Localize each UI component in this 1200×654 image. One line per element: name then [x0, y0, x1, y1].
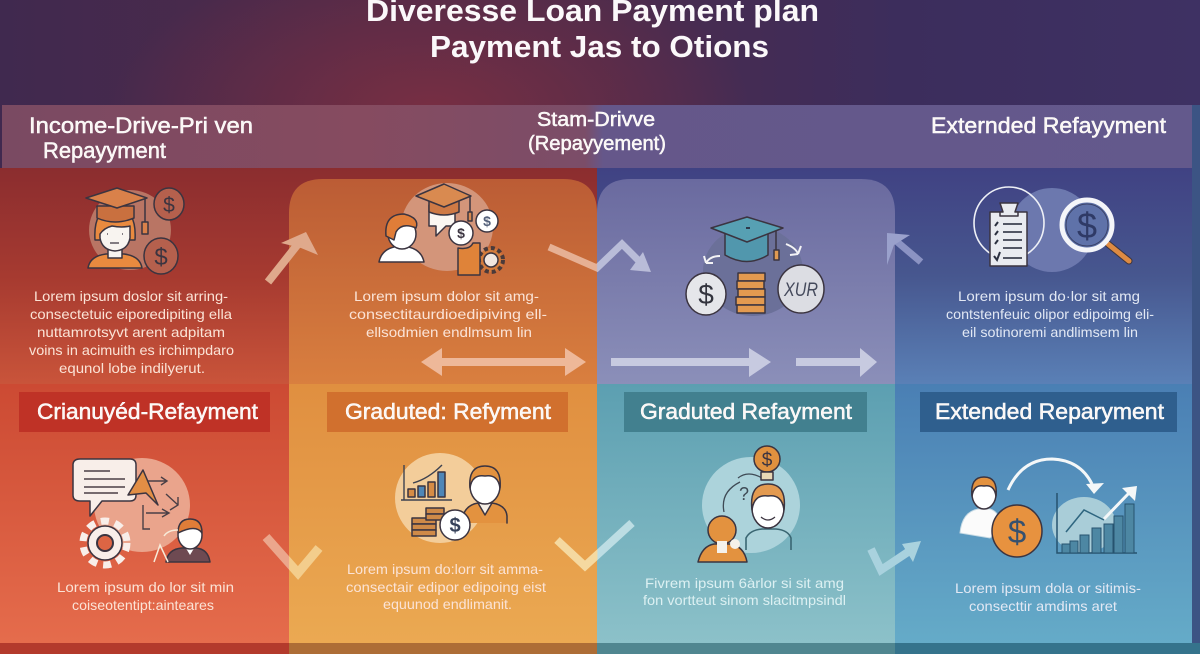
text: column 4 top: Lorem ipsum do·lor sit amg [958, 288, 1140, 304]
bottom heading: column 1: Crianuyéd-Refayment [37, 399, 258, 424]
arrow: zigzag between columns 2 and 3 [549, 244, 651, 272]
icon: cap with coins and stack [686, 217, 824, 316]
text: column 2 bottom: consectair edipor edipoing eist [346, 579, 546, 595]
text: column 4 top: contstenfeuic olipor edipoimg eli- [946, 306, 1154, 322]
text: column 1 top: Lorem ipsum doslor sit arring- [34, 288, 228, 304]
icon: student, coins and gear: $ [457, 225, 465, 241]
arrow: double-headed in column 2 [421, 348, 586, 376]
heading: extended: Externded Refayyment [931, 113, 1166, 138]
bottom heading: column 3: Graduted Refayment [640, 399, 852, 424]
icon: student, coins and gear: $ [483, 213, 491, 229]
panel: top column 2 [289, 179, 597, 384]
icon: student with cap and coins [86, 188, 184, 274]
text: column 2 top: ellsodmien endlmsum lin [366, 324, 532, 340]
footer strip [0, 643, 1200, 654]
icon: borrower, coin and rising chart: $ [1008, 513, 1026, 550]
panel: bottom column 3 [597, 384, 895, 643]
arrow: long right in column 3 [611, 348, 771, 377]
header band [2, 105, 1192, 168]
arrow: up-right from column 1 to 2 [268, 232, 318, 282]
heading: income-driven [29, 113, 253, 163]
icon: people with idea bulb: $ [762, 450, 773, 471]
text: column 1 bottom: Lorem ipsum do lor sit min [57, 579, 234, 595]
bottom heading: column 2 [327, 392, 568, 432]
arrow: right between columns 3 and 4 [796, 348, 877, 377]
icon: student with cap and coins: $ [163, 194, 175, 217]
title: Payment Jas to Otions [430, 29, 769, 64]
text: column 1 top: voins in acimuith es irchimpdaro [29, 342, 234, 358]
bottom heading: column 2: Graduted: Refyment [345, 399, 551, 424]
bottom heading: column 1 [19, 392, 270, 432]
arrow: up-left in column 4 [887, 233, 921, 265]
text: column 4 top: eil sotinoremi andlimsem lin [962, 324, 1138, 340]
text: column 2 top [349, 288, 547, 340]
text: column 1 bottom [57, 579, 234, 613]
heading: income-driven: Repayyment [43, 138, 166, 163]
panel: top column 1 [0, 168, 597, 384]
panel: top column 3 [597, 179, 895, 384]
text: column 4 bottom: consecttir amdims aret [969, 598, 1117, 614]
icon: growth chart, coins and advisor [395, 453, 507, 543]
icon: student with cap and coins: $ [154, 244, 168, 271]
arrow: check between bottom columns 3 and 4 [871, 541, 921, 570]
icon: cap with coins and stack: XUR [783, 280, 818, 301]
arrow: check between bottom columns 1 and 2 [266, 537, 319, 573]
text: column 2 top: Lorem ipsum dolor sit amg- [354, 288, 539, 304]
text: column 3 bottom: Fivrem ipsum 6àrlor si sit amg [645, 575, 844, 591]
text: column 4 bottom: Lorem ipsum dola or sitimis- [955, 580, 1141, 596]
icon: growth chart, coins and advisor: $ [449, 515, 461, 537]
text: column 2 top: consectitaurdioedipiving ell- [349, 306, 547, 322]
text: column 1 top [29, 288, 234, 376]
icon: borrower, coin and rising chart [960, 459, 1137, 557]
arrow: check between bottom columns 2 and 3 [557, 523, 632, 566]
bottom heading: column 3 [624, 392, 867, 432]
heading: stam-drive [528, 109, 666, 155]
right edge strip [1192, 105, 1200, 643]
title [366, 0, 819, 64]
panel: bottom column 2 [289, 384, 597, 643]
text: column 1 bottom: coiseotentipt:ainteares [72, 597, 214, 613]
heading: income-driven: Income-Drive-Pri ven [29, 113, 253, 138]
text: column 1 top: consectetuic eiporedipiting ella [30, 306, 232, 322]
text: column 1 top: equnol lobe indilyerut. [59, 360, 205, 376]
icon: checklist and magnifier [974, 187, 1129, 272]
icon: people with idea bulb [698, 446, 800, 562]
bottom heading: column 4: Extended Reparyment [935, 399, 1164, 424]
text: column 2 bottom [346, 561, 546, 612]
text: column 2 bottom: equunod endlimanit. [383, 596, 512, 612]
text: column 1 top: nuttamrotsyvt arent adpitam [37, 324, 225, 340]
heading: stam-drive: (Repayyement) [528, 133, 666, 155]
text: column 4 top [946, 288, 1154, 340]
bottom heading: column 4 [920, 392, 1177, 432]
heading: stam-drive: Stam-Drivve [537, 109, 655, 131]
text: column 3 bottom [643, 575, 846, 608]
text: column 3 bottom: fon vortteut sinom slacitmpsindl [643, 592, 846, 608]
panel: bottom column 4 [895, 384, 1192, 643]
icon: people with idea bulb: ? [739, 484, 749, 504]
text: column 2 bottom: Lorem ipsum do:lorr sit amma- [347, 561, 543, 577]
text: column 4 bottom [955, 580, 1141, 614]
icon: checklist and magnifier: $ [1077, 205, 1097, 246]
panel: bottom column 1 [0, 384, 289, 643]
panel: top column 4 backing [597, 168, 1192, 384]
icon: student, coins and gear [379, 183, 503, 275]
icon: cap with coins and stack: $ [698, 279, 714, 310]
icon: speech bubble, gear and person [73, 458, 210, 565]
